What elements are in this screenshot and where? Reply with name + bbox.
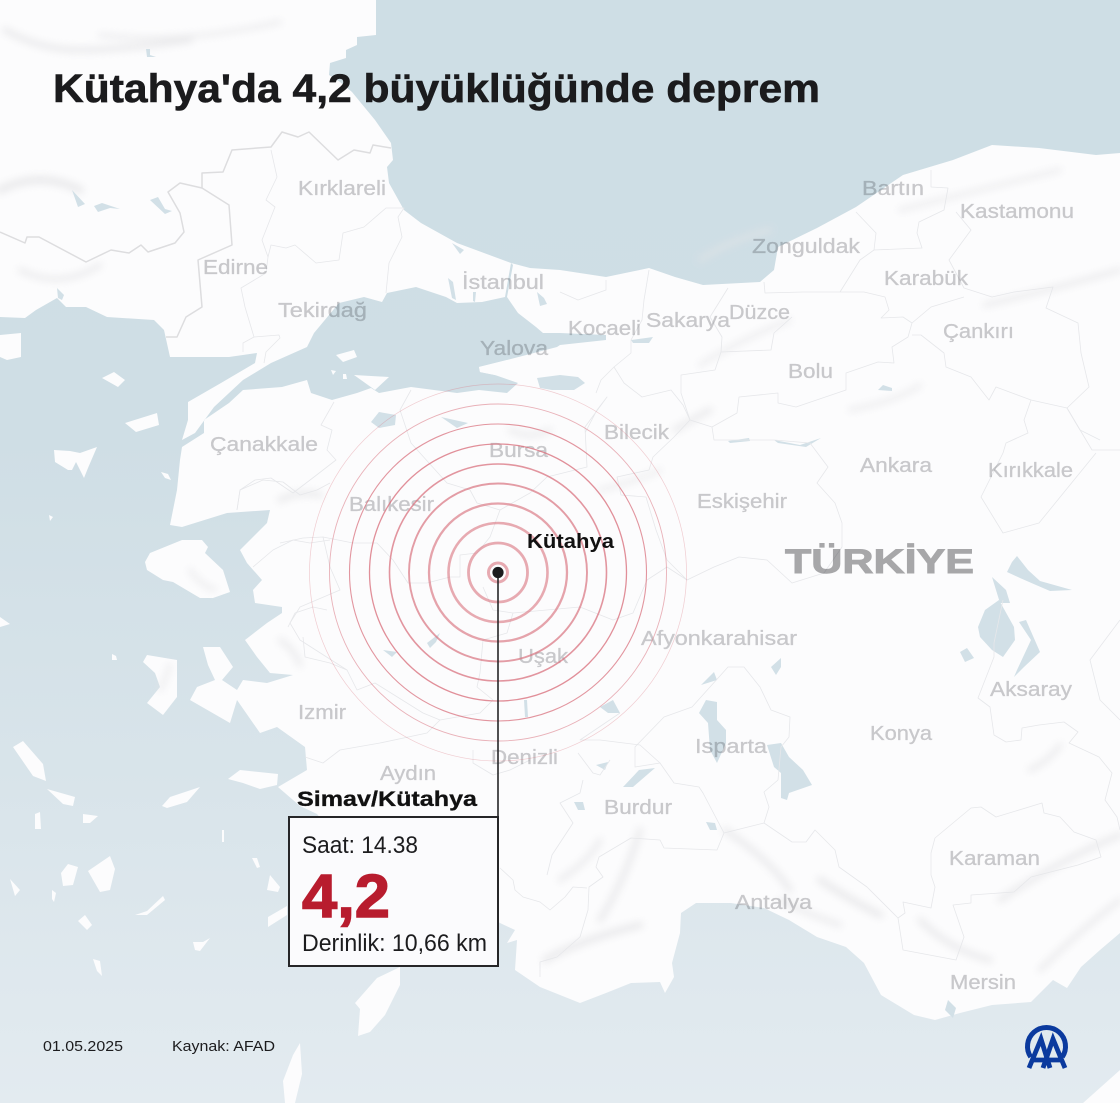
Samos <box>228 770 278 789</box>
label: Kocaeli: Kocaeli <box>568 318 641 340</box>
country label: Türkiye: TÜRKİYE <box>785 543 974 581</box>
Samothrace <box>102 372 125 387</box>
Gokceada <box>125 413 159 432</box>
label: Izmir: Izmir <box>298 702 346 724</box>
province labels <box>203 178 1074 994</box>
Cyclades and Dodecanese <box>13 741 46 781</box>
Lesbos <box>145 540 230 598</box>
icon: AA logo <box>1028 1027 1066 1068</box>
magnitude: 4,2 <box>302 862 390 930</box>
label: Aksaray: Aksaray <box>990 679 1072 701</box>
Chios <box>143 655 177 715</box>
label: Tekirdağ: Tekirdağ <box>278 300 367 322</box>
label: Aydın: Aydın <box>380 763 436 785</box>
label: Kırıkkale: Kırıkkale <box>988 460 1073 482</box>
leader line from epicentre to callout <box>497 572 499 818</box>
source: Kaynak: AFAD <box>172 1039 275 1055</box>
label: Çankırı: Çankırı <box>943 321 1014 343</box>
label: Eskişehir: Eskişehir <box>697 491 787 513</box>
label: Yalova: Yalova <box>480 338 549 360</box>
title: Kütahya'da 4,2 büyüklüğünde deprem <box>53 67 820 111</box>
callout heading: Simav/Kütahya: Simav/Kütahya <box>297 788 477 811</box>
callout box <box>289 817 498 966</box>
epicentre dot <box>492 567 504 578</box>
label: Zonguldak: Zonguldak <box>752 236 861 258</box>
Rhodes <box>355 967 400 1036</box>
label: Bilecik: Bilecik <box>604 422 670 444</box>
label: Karabük: Karabük <box>884 268 969 290</box>
label: Isparta: Isparta <box>695 736 768 758</box>
label: Burdur: Burdur <box>604 797 672 819</box>
label: Çanakkale: Çanakkale <box>210 434 318 456</box>
Bozcaada <box>161 472 171 480</box>
label: Antalya: Antalya <box>735 892 813 914</box>
city label: Kütahya: Kütahya <box>527 531 615 553</box>
label: Kastamonu: Kastamonu <box>960 201 1074 223</box>
label: Düzce: Düzce <box>729 302 790 324</box>
label: Ankara: Ankara <box>860 455 933 477</box>
label: Karaman: Karaman <box>949 848 1040 870</box>
label: İstanbul: İstanbul <box>462 271 544 294</box>
label: Konya: Konya <box>870 723 933 745</box>
label: Bolu: Bolu <box>788 361 833 383</box>
label: Sakarya: Sakarya <box>646 310 731 332</box>
callout: earthquake details <box>289 817 498 966</box>
Limnos <box>54 447 97 478</box>
label: Afyonkarahisar: Afyonkarahisar <box>641 628 797 650</box>
label: Mersin: Mersin <box>950 972 1016 994</box>
label: Bursa: Bursa <box>489 440 549 462</box>
label: Uşak: Uşak <box>518 646 569 668</box>
map: lakes <box>57 49 1072 1018</box>
seismic rings around the epicentre <box>310 384 686 761</box>
label: Balıkesir: Balıkesir <box>349 494 434 516</box>
time: Saat: 14.38 <box>302 832 418 859</box>
Marmara islands over sea <box>331 350 518 390</box>
depth: Derinlik: 10,66 km <box>302 930 487 957</box>
map: Marmara sea and Dardanelles <box>182 263 606 447</box>
Cyprus <box>1083 1070 1120 1103</box>
Thasos <box>0 333 21 360</box>
label: Edirne: Edirne <box>203 257 268 279</box>
map: country borders <box>0 132 391 337</box>
map: province borders <box>237 150 1120 977</box>
label: Denizli: Denizli <box>491 747 558 769</box>
label: Kırklareli: Kırklareli <box>298 178 386 200</box>
Ikaria <box>162 787 200 808</box>
date: 01.05.2025 <box>43 1039 123 1055</box>
Karpathos <box>283 1043 302 1103</box>
label: Bartın: Bartın <box>862 178 924 200</box>
